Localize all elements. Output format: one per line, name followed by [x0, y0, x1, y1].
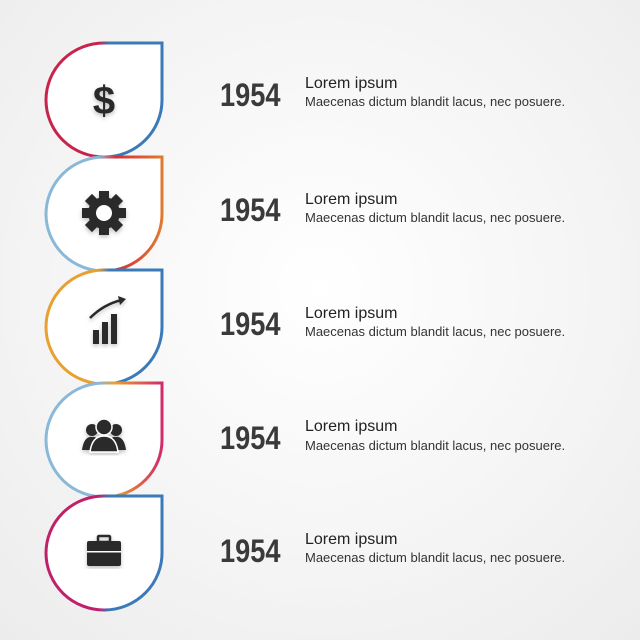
- text 4: [305, 418, 565, 453]
- text 5: Lorem ipsum: [305, 531, 397, 548]
- icon: briefcase: [87, 536, 121, 566]
- icon: gear: [82, 191, 126, 235]
- icon: dollar: $: [93, 79, 115, 123]
- text 3: Lorem ipsum: [305, 305, 397, 322]
- icon: chart: [90, 296, 126, 344]
- step 1: [46, 43, 565, 157]
- year 4: 1954: [220, 421, 281, 457]
- text 2: [305, 191, 565, 225]
- text 5: Maecenas dictum blandit lacus, nec posuere.: [305, 550, 565, 565]
- year 1: 1954: [220, 78, 281, 114]
- step 2: [46, 157, 565, 271]
- step 5: [46, 496, 565, 610]
- step 4: [46, 383, 565, 497]
- shape 5: [46, 496, 162, 610]
- text 1: [305, 75, 565, 109]
- shape 4: [46, 383, 162, 497]
- step 3: [46, 270, 565, 384]
- text 3: [305, 305, 565, 339]
- text 4: Lorem ipsum: [305, 418, 397, 435]
- text 1: Lorem ipsum: [305, 75, 397, 92]
- text 5: [305, 531, 565, 565]
- shape 1: [46, 43, 162, 157]
- text 3: Maecenas dictum blandit lacus, nec posuere.: [305, 324, 565, 339]
- icon: people: [82, 419, 126, 452]
- year 3: 1954: [220, 307, 281, 343]
- text 4: Maecenas dictum blandit lacus, nec posuere.: [305, 438, 565, 453]
- shape 3: [46, 270, 162, 384]
- year 2: 1954: [220, 193, 281, 229]
- year 5: 1954: [220, 534, 281, 570]
- text 2: Maecenas dictum blandit lacus, nec posuere.: [305, 210, 565, 225]
- text 1: Maecenas dictum blandit lacus, nec posuere.: [305, 94, 565, 109]
- text 2: Lorem ipsum: [305, 191, 397, 208]
- shape 2: [46, 157, 162, 271]
